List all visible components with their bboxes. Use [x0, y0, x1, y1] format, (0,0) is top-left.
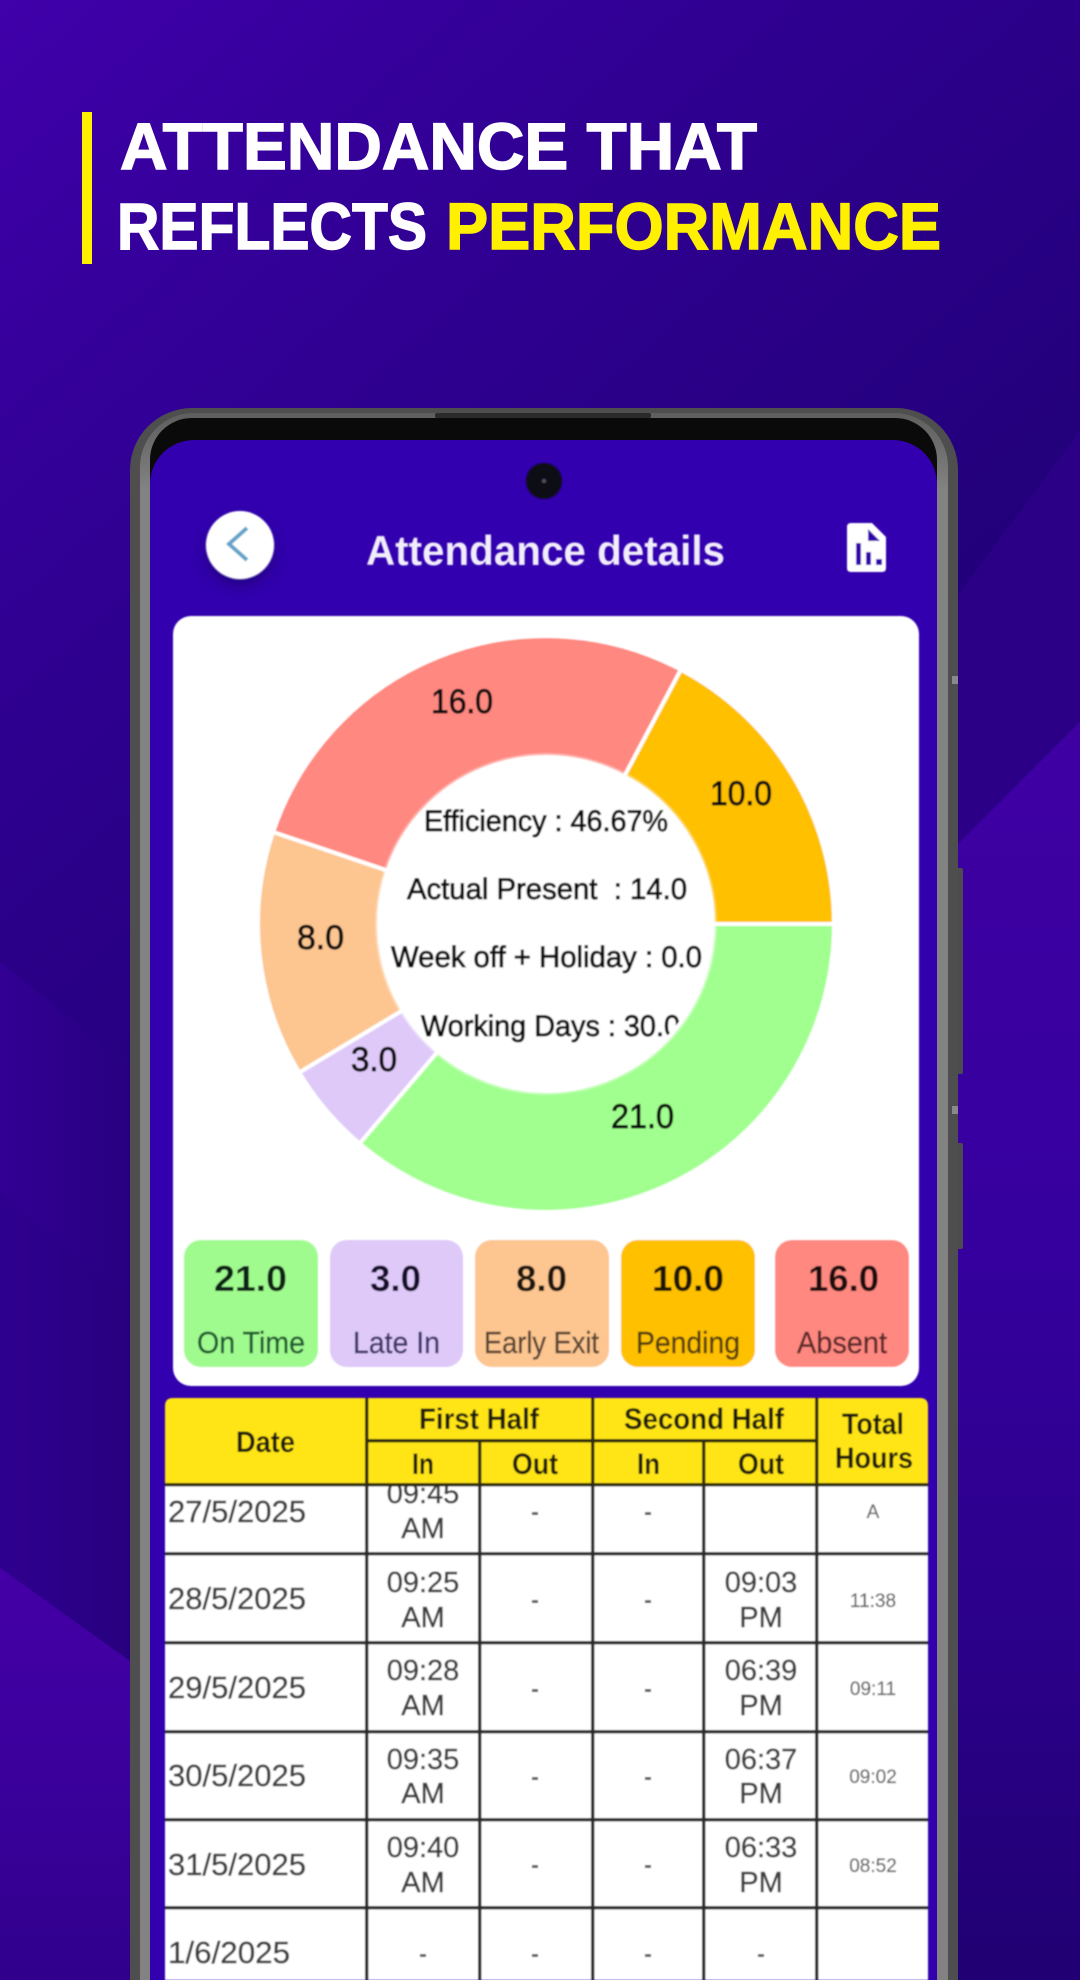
- donut chart: [258, 636, 834, 1212]
- second half out times: [725, 1567, 797, 1899]
- table header: [165, 1398, 928, 1486]
- phone side buttons: [955, 868, 963, 1249]
- donut value labels: 3.0: [351, 1041, 397, 1079]
- legend: absent: [775, 1240, 909, 1367]
- donut center text: Working Days : 30.0: [421, 1010, 680, 1043]
- empty value dashes: -: [757, 1941, 765, 1968]
- table header: Second Half: [624, 1403, 785, 1436]
- panel: summary card: [173, 616, 919, 1386]
- empty value dashes: -: [531, 1587, 539, 1614]
- date column: 29/5/2025: [168, 1670, 306, 1705]
- table body background: [165, 1480, 928, 1980]
- empty value dashes: -: [644, 1764, 652, 1791]
- legend: on time: [184, 1240, 318, 1367]
- empty value dashes: -: [644, 1941, 652, 1968]
- empty value dashes: -: [531, 1676, 539, 1703]
- empty value dashes: -: [644, 1676, 652, 1703]
- icon: back button: [206, 511, 274, 585]
- date column: 27/5/2025: [168, 1494, 306, 1529]
- donut value labels: 10.0: [710, 775, 772, 813]
- segment: absent 16: [273, 636, 681, 871]
- second half out times: 09:03: [725, 1567, 797, 1599]
- legend: late in: [330, 1240, 463, 1367]
- first half in times: AM: [401, 1690, 445, 1722]
- first half in times: 09:40: [387, 1832, 459, 1864]
- empty value dashes: -: [531, 1941, 539, 1968]
- first half in times: AM: [401, 1513, 445, 1545]
- attendance table: [165, 1398, 928, 1980]
- empty value dashes: -: [644, 1852, 652, 1879]
- icon: camera: [526, 463, 562, 499]
- second half out times: PM: [739, 1602, 783, 1634]
- empty value dashes: -: [531, 1852, 539, 1879]
- legend: pending: 10.0: [652, 1258, 724, 1299]
- date column: 30/5/2025: [168, 1758, 306, 1793]
- donut center text: Week off + Holiday : 0.0: [391, 941, 702, 974]
- empty value dashes: -: [531, 1764, 539, 1791]
- second half out times: 06:39: [725, 1655, 797, 1687]
- first half in times: 09:28: [387, 1655, 459, 1687]
- title: PERFORMANCE: [446, 189, 941, 263]
- segment: pending 10: [624, 670, 834, 924]
- segment: on time 21: [360, 924, 834, 1212]
- screen content: [165, 463, 928, 1980]
- table header: In: [412, 1448, 434, 1481]
- second half out times: 06:33: [725, 1832, 797, 1864]
- title: [117, 109, 941, 263]
- donut center text: Efficiency : 46.67%: [424, 805, 668, 838]
- first half in times: 09:35: [387, 1744, 459, 1776]
- table grid lines: [165, 1480, 928, 1980]
- phone screen: [150, 440, 937, 1980]
- accent bar: [82, 112, 92, 264]
- first half in times: 09:25: [387, 1567, 459, 1599]
- total hours column: 09:11: [850, 1679, 896, 1700]
- table header: Total: [842, 1408, 904, 1441]
- second half out times: PM: [739, 1867, 783, 1899]
- legend: pending: Pending: [636, 1325, 740, 1360]
- total hours column: 09:02: [849, 1767, 897, 1788]
- legend: early exit: 8.0: [516, 1258, 567, 1299]
- date column: 28/5/2025: [168, 1581, 306, 1616]
- title: REFLECTS: [117, 189, 427, 263]
- screen heading: Attendance details: [366, 527, 725, 574]
- total hours column: 08:52: [849, 1856, 897, 1877]
- donut value labels: 8.0: [297, 919, 344, 957]
- empty value dashes: [419, 1499, 765, 1968]
- empty value dashes: -: [644, 1499, 652, 1526]
- donut value labels: 16.0: [431, 683, 493, 721]
- legend: late in: 3.0: [370, 1258, 421, 1299]
- empty value dashes: -: [644, 1587, 652, 1614]
- legend: absent: Absent: [797, 1325, 887, 1360]
- second half out times: 06:37: [725, 1744, 797, 1776]
- phone mockup: [130, 408, 963, 1980]
- date column: 31/5/2025: [168, 1847, 306, 1882]
- table header: Date: [236, 1426, 295, 1459]
- table header: Hours: [835, 1442, 913, 1475]
- second half out times: PM: [739, 1778, 783, 1810]
- first half in times: 09:45: [387, 1478, 459, 1510]
- legend: on time: On Time: [197, 1325, 305, 1360]
- legend: absent: 16.0: [808, 1258, 879, 1299]
- date column: 1/6/2025: [168, 1935, 290, 1970]
- donut value labels: [297, 683, 772, 1136]
- legend: early exit: Early Exit: [484, 1325, 599, 1360]
- total hours column: 11:38: [850, 1591, 896, 1612]
- segment: late in 3: [299, 1010, 438, 1144]
- total hours column: [849, 1502, 897, 1877]
- title: ATTENDANCE THAT: [120, 109, 757, 183]
- date column: [168, 1494, 306, 1970]
- icon: report file: [847, 523, 886, 572]
- second half out times: PM: [739, 1690, 783, 1722]
- first half in times: AM: [401, 1602, 445, 1634]
- table header: In: [637, 1448, 660, 1481]
- first half in times: [387, 1478, 459, 1899]
- legend: early exit: [475, 1240, 609, 1367]
- table header: First Half: [419, 1403, 540, 1436]
- donut center text: [391, 805, 702, 1043]
- legend: on time: 21.0: [214, 1258, 287, 1299]
- phone frame: [130, 408, 958, 1980]
- first half in times: AM: [401, 1867, 445, 1899]
- empty value dashes: -: [419, 1941, 427, 1968]
- segment: early exit 8: [258, 832, 403, 1072]
- donut value labels: 21.0: [611, 1098, 674, 1136]
- legend: pending: [621, 1240, 755, 1367]
- total hours column: A: [867, 1502, 880, 1523]
- first half in times: AM: [401, 1778, 445, 1810]
- donut center text: Actual Present : 14.0: [407, 873, 687, 906]
- empty value dashes: -: [531, 1499, 539, 1526]
- table header: Out: [738, 1448, 784, 1481]
- table header: Out: [512, 1448, 558, 1481]
- legend: late in: Late In: [353, 1325, 440, 1360]
